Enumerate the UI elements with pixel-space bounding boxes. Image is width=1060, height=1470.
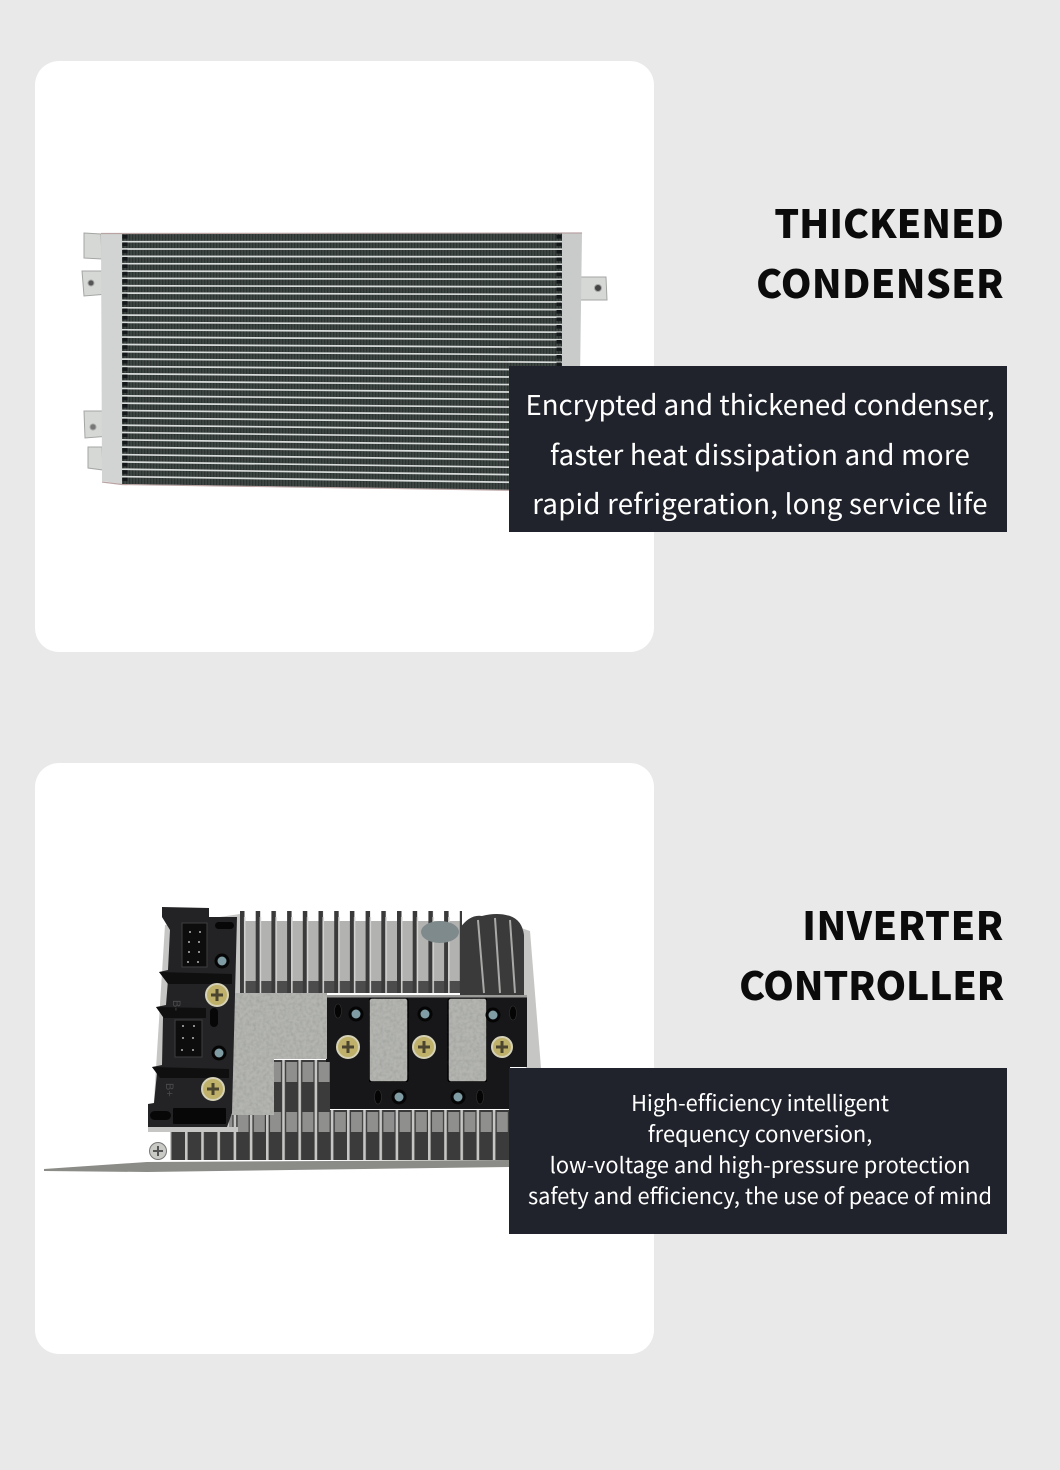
callout text: rapid refrigeration, long service life [532, 482, 988, 522]
callout text [528, 1087, 992, 1211]
dark fin core [122, 233, 562, 491]
right black terminal block [326, 997, 527, 1109]
callout text [525, 383, 995, 522]
baseplate screw [150, 1142, 166, 1160]
callout: inverter description [509, 1068, 1007, 1234]
silver tabs [369, 998, 487, 1082]
heading: inverter controller: CONTROLLER [739, 956, 1004, 1012]
top cooling fins [240, 911, 462, 993]
heading: inverter controller [739, 896, 1004, 1012]
small blue screws [214, 956, 498, 1102]
central silver plate [229, 993, 327, 1115]
callout text: Encrypted and thickened condenser, [525, 383, 995, 423]
right curved fins [460, 914, 524, 995]
polarity labels: B- [170, 1000, 182, 1011]
callout text: High-efficiency intelligent [631, 1087, 889, 1118]
callout: condenser description [509, 366, 1007, 532]
callout text: low-voltage and high-pressure protection [550, 1149, 970, 1180]
lower cooling fins [170, 1060, 510, 1160]
panel: condenser card [35, 61, 654, 652]
right header tank [562, 233, 582, 490]
left fin teeth [122, 235, 128, 484]
callout text: frequency conversion, [648, 1118, 872, 1149]
white flat tubes [122, 242, 562, 483]
left mounting brackets [82, 233, 110, 470]
photo: aluminium condenser [82, 232, 608, 491]
terminal block slots [334, 1004, 516, 1104]
right fin teeth [556, 235, 562, 491]
right mounting bracket [578, 277, 607, 300]
silver ledge [148, 1127, 238, 1132]
left header tank [101, 234, 122, 484]
heading: thickened condenser: THICKENED [774, 194, 1004, 250]
left black connector module [148, 907, 237, 1127]
connector sockets [175, 923, 207, 1057]
gold terminal screws [202, 984, 512, 1100]
screw cross slots [207, 989, 508, 1095]
heading: thickened condenser: CONDENSER [756, 254, 1004, 310]
polarity labels: B+ [163, 1083, 175, 1097]
callout text: safety and efficiency, the use of peace of mind [528, 1180, 992, 1211]
pink frame edges [101, 233, 582, 491]
connector shelves [152, 972, 232, 1078]
polarity labels [163, 1000, 182, 1097]
connector module slots [150, 922, 234, 1124]
top rail [327, 995, 527, 998]
photo: inverter controller [44, 907, 541, 1172]
baseplate [44, 1160, 510, 1172]
valve cap [421, 921, 459, 943]
panel: inverter card [35, 763, 654, 1354]
callout text: faster heat dissipation and more [550, 433, 970, 473]
housing edges [152, 914, 541, 1132]
heading: thickened condenser [756, 194, 1004, 310]
heading: inverter controller: INVERTER [802, 896, 1004, 952]
